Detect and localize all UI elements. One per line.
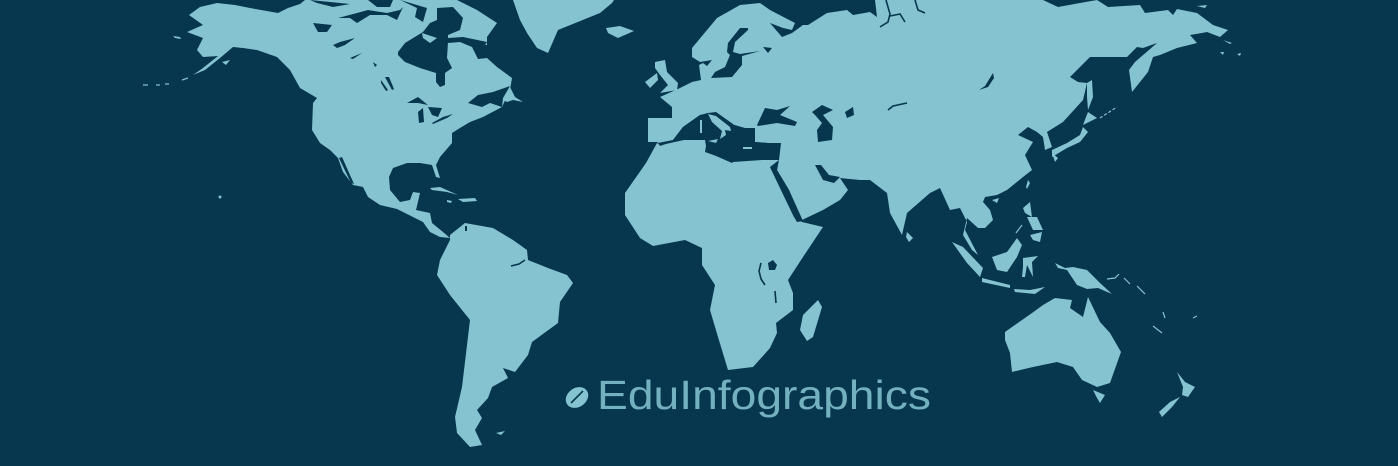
islands: Kuril chain and north Pacific	[1100, 5, 1241, 118]
continent: Eurasia	[648, 0, 1228, 255]
islands: Taiwan and Hainan	[992, 180, 1030, 203]
islands: New Zealand	[1159, 372, 1195, 417]
islands: British Isles	[645, 60, 678, 93]
islands: Caribbean	[430, 187, 477, 203]
continent: South America	[437, 223, 573, 447]
continent: Australia	[1005, 297, 1121, 403]
islands: Hawaii and Aleutians	[143, 36, 230, 198]
islands: Southeast Asia	[952, 202, 1045, 294]
logo icon: leaf	[562, 383, 592, 412]
islands: Melanesia	[1107, 274, 1197, 333]
island: Newfoundland	[503, 87, 523, 102]
islands: Falklands	[496, 431, 505, 435]
continent: Greenland	[513, 0, 614, 53]
island: Madagascar	[800, 300, 822, 341]
island: Iceland	[606, 26, 634, 38]
sea: Red Sea	[770, 167, 803, 222]
continent: North America	[187, 0, 512, 238]
continent: Africa	[625, 140, 823, 370]
island: New Guinea	[1055, 263, 1112, 294]
sea: Mediterranean	[658, 112, 780, 163]
island: Sri Lanka	[906, 232, 913, 242]
islands: Japan and Sakhalin	[1052, 80, 1097, 162]
watermark: @EduInfographics: EduInfographics	[597, 372, 931, 418]
